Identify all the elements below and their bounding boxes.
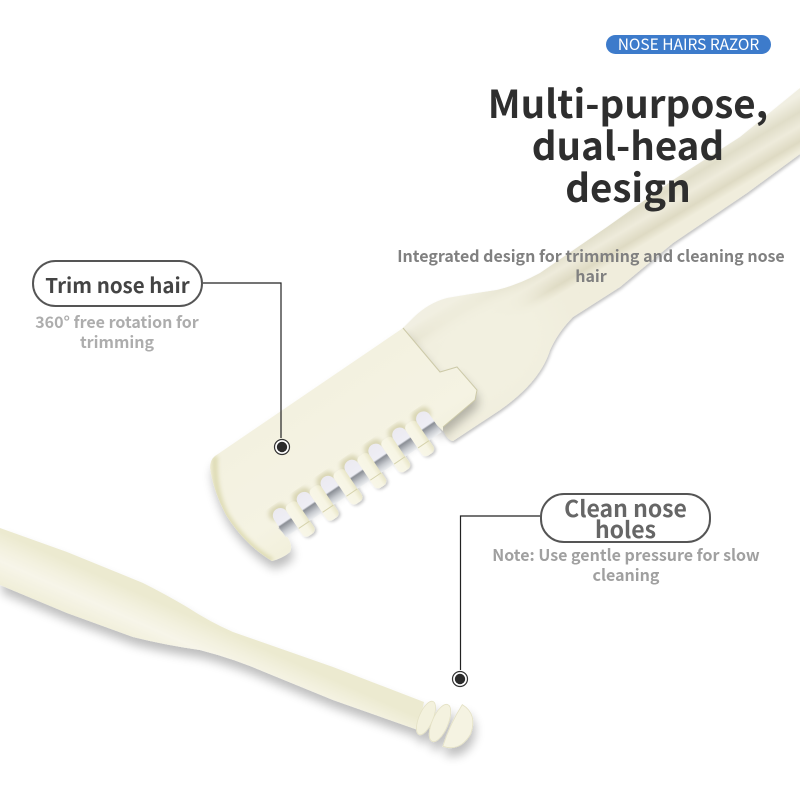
ear pick tool bbox=[0, 528, 480, 755]
window shading bbox=[266, 404, 434, 524]
pick ring two bbox=[425, 701, 455, 745]
tooth tip seams bbox=[299, 441, 429, 528]
title: dual-head bbox=[532, 116, 724, 172]
handle neck highlight bbox=[414, 286, 545, 366]
caption: clean nose holes: Note: Use gentle pressure for slow bbox=[492, 542, 760, 566]
pick ring one bbox=[413, 699, 439, 737]
comb left rim shading bbox=[215, 456, 272, 561]
connector: trim nose hair bbox=[203, 283, 290, 454]
connector: clean nose holes bbox=[452, 516, 540, 686]
comb teeth bbox=[284, 419, 436, 539]
razor handle bbox=[403, 88, 800, 441]
title: design bbox=[565, 158, 691, 214]
caption: trim nose hair bbox=[35, 309, 199, 353]
pill label: clean nose holes: Clean nose bbox=[564, 490, 687, 524]
caption: trim nose hair: 360° free rotation for bbox=[35, 309, 199, 333]
pill label: trim nose hair bbox=[32, 260, 203, 307]
subtitle: Integrated design for trimming and cleaning nose bbox=[397, 243, 785, 267]
caption: clean nose holes bbox=[492, 542, 760, 586]
comb teeth and blade windows bbox=[266, 404, 450, 548]
pick scoop head bbox=[441, 704, 480, 755]
title: Multi-purpose, bbox=[488, 74, 768, 130]
caption: clean nose holes: cleaning bbox=[593, 562, 659, 586]
pill label: trim nose hair: Trim nose hair bbox=[45, 269, 190, 299]
title bbox=[488, 74, 768, 214]
head cover seam bbox=[403, 328, 477, 427]
caption: trim nose hair: trimming bbox=[80, 329, 154, 353]
pick shaft bbox=[0, 528, 424, 730]
subtitle: hair bbox=[575, 263, 607, 287]
subtitle bbox=[397, 243, 785, 287]
pill label: clean nose holes: holes bbox=[595, 511, 656, 545]
comb head bbox=[210, 328, 477, 561]
badge: nose hairs razor: NOSE HAIRS RAZOR bbox=[618, 33, 759, 55]
blade windows bbox=[270, 408, 442, 537]
pill label: clean nose holes bbox=[540, 493, 711, 543]
razor head and handle bbox=[210, 88, 800, 561]
